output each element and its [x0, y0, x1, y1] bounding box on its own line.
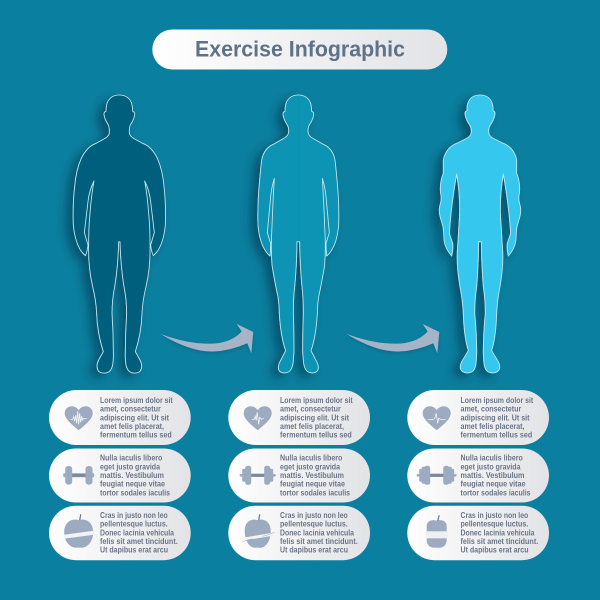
text block: Ut dapibus erat arcu: [460, 546, 529, 555]
text block: eget justo gravida: [460, 462, 521, 471]
icon: small dumbbell: [63, 466, 94, 485]
text block: felis sit amet tincidunt.: [280, 537, 358, 546]
arrow: first to second figure: [161, 324, 253, 353]
icon: narrower apple with tape: [242, 514, 275, 548]
arrow: second to third figure: [347, 324, 439, 353]
panel: column 2 apple: [228, 506, 370, 560]
panel: column 3 apple: [407, 506, 549, 560]
text block: fermentum tellus sed: [280, 431, 352, 440]
text block: feugiat neque vitae: [280, 480, 345, 489]
text block: fermentum tellus sed: [460, 431, 532, 440]
text block: tortor sodales iaculis: [280, 488, 350, 497]
text block: felis sit amet tincidunt.: [460, 537, 538, 546]
icon: heart with pulse: [244, 406, 272, 430]
title: Exercise Infographic: [195, 36, 405, 62]
icon: round apple with tape: [64, 514, 94, 548]
text block: [280, 396, 353, 440]
panel: column 3 heart: [407, 390, 549, 445]
panel: column 1 heart: [49, 390, 191, 445]
text block: amet, consectetur: [280, 405, 341, 414]
panel: column 3 dumbbell: [407, 448, 549, 502]
figure: fit muscular body: [439, 95, 521, 373]
text block: Cras in justo non leo: [280, 511, 348, 520]
text block: adipiscing elit. Ut sit: [280, 413, 349, 422]
text block: tortor sodales iaculis: [100, 488, 170, 497]
text block: Lorem ipsum dolor sit: [280, 396, 353, 405]
title: [152, 30, 447, 70]
text block: Lorem ipsum dolor sit: [100, 396, 173, 405]
icon: slim-waist apple with tape: [426, 515, 448, 548]
icon: large dumbbell: [417, 466, 457, 485]
text block: Nulla iaculis libero: [460, 454, 523, 463]
text block: amet felis placerat,: [280, 422, 344, 431]
text block: pellentesque luctus.: [280, 520, 348, 529]
text block: pellentesque luctus.: [100, 520, 168, 529]
text block: Donec lacinia vehicula: [460, 528, 535, 537]
panel: column 1 dumbbell: [49, 448, 191, 502]
icon: heart with pulse: [423, 406, 451, 430]
icon: heart with pulse: [65, 406, 93, 430]
text block: tortor sodales iaculis: [460, 488, 531, 497]
text block: Donec lacinia vehicula: [280, 528, 354, 537]
icon: medium dumbbell: [240, 466, 276, 485]
text block: [460, 396, 533, 440]
text block: Cras in justo non leo: [460, 511, 528, 520]
text block: [460, 511, 538, 555]
figure: average body: [258, 95, 339, 373]
text block: feugiat neque vitae: [100, 480, 165, 489]
panel: column 1 apple: [49, 506, 191, 560]
text block: adipiscing elit. Ut sit: [100, 413, 169, 422]
text block: Cras in justo non leo: [100, 511, 168, 520]
text block: amet, consectetur: [460, 405, 521, 414]
text block: Nulla iaculis libero: [100, 454, 162, 463]
text block: pellentesque luctus.: [460, 520, 528, 529]
text block: Lorem ipsum dolor sit: [460, 396, 533, 405]
text block: eget justo gravida: [280, 462, 340, 471]
text block: [460, 454, 531, 497]
text block: Donec lacinia vehicula: [100, 528, 174, 537]
text block: [280, 454, 350, 497]
text block: eget justo gravida: [100, 462, 160, 471]
text block: [100, 511, 178, 555]
text block: [100, 454, 170, 497]
text block: amet, consectetur: [100, 405, 161, 414]
text block: [100, 396, 173, 440]
text block: [280, 511, 358, 555]
text block: mattis. Vestibulum: [460, 471, 524, 480]
text block: fermentum tellus sed: [100, 431, 172, 440]
text block: adipiscing elit. Ut sit: [460, 413, 530, 422]
text block: mattis. Vestibulum: [280, 471, 344, 480]
text block: amet felis placerat,: [460, 422, 524, 431]
text block: Ut dapibus erat arcu: [280, 546, 348, 555]
text block: mattis. Vestibulum: [100, 471, 164, 480]
text block: feugiat neque vitae: [460, 480, 526, 489]
text block: amet felis placerat,: [100, 422, 164, 431]
panel: column 2 heart: [228, 390, 370, 445]
text block: Nulla iaculis libero: [280, 454, 342, 463]
figure: overweight body: [73, 95, 165, 373]
panel: column 2 dumbbell: [228, 448, 370, 502]
text block: Ut dapibus erat arcu: [100, 546, 168, 555]
text block: felis sit amet tincidunt.: [100, 537, 178, 546]
